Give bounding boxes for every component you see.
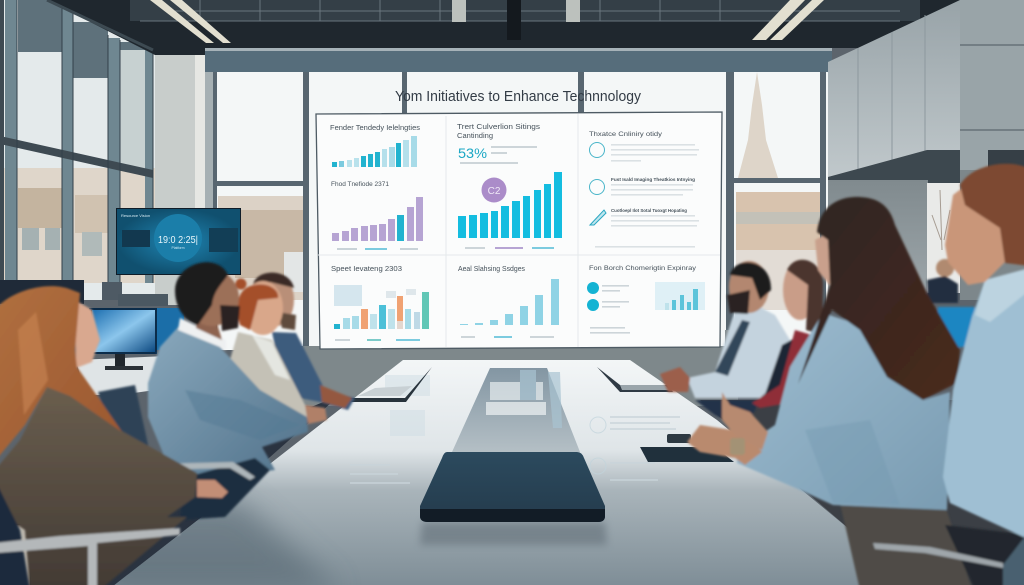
person: seated man right — [660, 261, 790, 430]
heading: Yom Initiatives to Enhance Technnology — [395, 89, 642, 105]
chart panel: bottom centre — [458, 266, 559, 338]
desktop monitors — [0, 280, 190, 395]
chart panel: top centre: Cantinding — [457, 133, 493, 140]
chair arm centre — [153, 462, 255, 480]
buildings outside — [218, 72, 820, 310]
chart panel: bottom right — [587, 265, 705, 334]
text panel: top right: Fust Isald Imaging Theatkios Intnying — [611, 177, 695, 182]
window frames — [213, 70, 826, 350]
screen: dashboard panel — [316, 89, 722, 349]
text panel: top right: Thxatce Cnliniry otidy — [589, 131, 663, 138]
chair arm right — [873, 543, 1003, 568]
monitor right — [938, 307, 975, 347]
chart panel: bottom right: Fon Borch Chomerigtin Expinray — [589, 265, 697, 272]
wall monitor — [116, 208, 241, 275]
people — [0, 164, 1024, 585]
person: woman red top — [752, 260, 823, 408]
person: man right edge — [943, 164, 1024, 585]
wall monitor: Platform — [171, 246, 185, 250]
person: woman blue shirt — [687, 197, 972, 585]
text panel: top right — [589, 131, 699, 248]
chart panel: top left: Fender Tendedy Ielelngties — [330, 125, 421, 132]
person: man with blue jacket — [148, 262, 327, 480]
wall under screen — [298, 346, 738, 406]
chair arm left — [0, 528, 180, 585]
reflections on table — [350, 370, 680, 484]
chart panel: top left — [330, 125, 421, 167]
chart panel: bottom centre: Aeal Slahsing Ssdges — [458, 266, 525, 273]
table — [100, 360, 923, 585]
laptop left — [350, 367, 432, 402]
person: man with beard far back — [253, 273, 355, 410]
left windows — [0, 0, 156, 300]
chart panel: top centre: C2 — [488, 186, 501, 197]
person: woman beige jacket — [230, 278, 322, 420]
trousers under man — [180, 458, 270, 520]
icon: chart circle — [590, 142, 604, 158]
person: woman brown jacket left — [0, 286, 228, 585]
pillar — [155, 55, 197, 305]
chart panel: middle left: Fhod Tnefiode 2371 — [331, 181, 389, 188]
chart panel: middle left — [331, 181, 423, 250]
chair left — [0, 480, 30, 585]
wall monitor: Resource Vision — [121, 213, 150, 218]
icon: pen — [590, 210, 606, 225]
right wall — [828, 0, 1024, 310]
chart panel: top centre — [457, 124, 562, 249]
icon: document circle — [590, 180, 604, 194]
chart panel: top centre: 53% — [458, 145, 487, 161]
chair behind man — [98, 385, 152, 470]
phone — [667, 434, 691, 443]
central window — [216, 70, 828, 350]
chair right — [1003, 530, 1024, 585]
ceiling — [47, 0, 960, 72]
chart panel: top centre: Trert Culverlion Sitings — [457, 124, 541, 131]
floor — [0, 395, 340, 585]
folder on table — [420, 452, 605, 522]
chart panel: bottom left: Speet Ievateng 2303 — [331, 266, 402, 273]
tablet — [640, 447, 734, 462]
text panel: top right: Cuotloepl Ilot Sotal Tuoxgt Hopating — [611, 208, 687, 213]
laptop right — [597, 367, 673, 392]
table items — [350, 367, 734, 522]
wall monitor: 19:0 2:25| — [158, 235, 198, 246]
chart panel: bottom left — [331, 266, 429, 341]
person: far man by window — [927, 259, 958, 303]
